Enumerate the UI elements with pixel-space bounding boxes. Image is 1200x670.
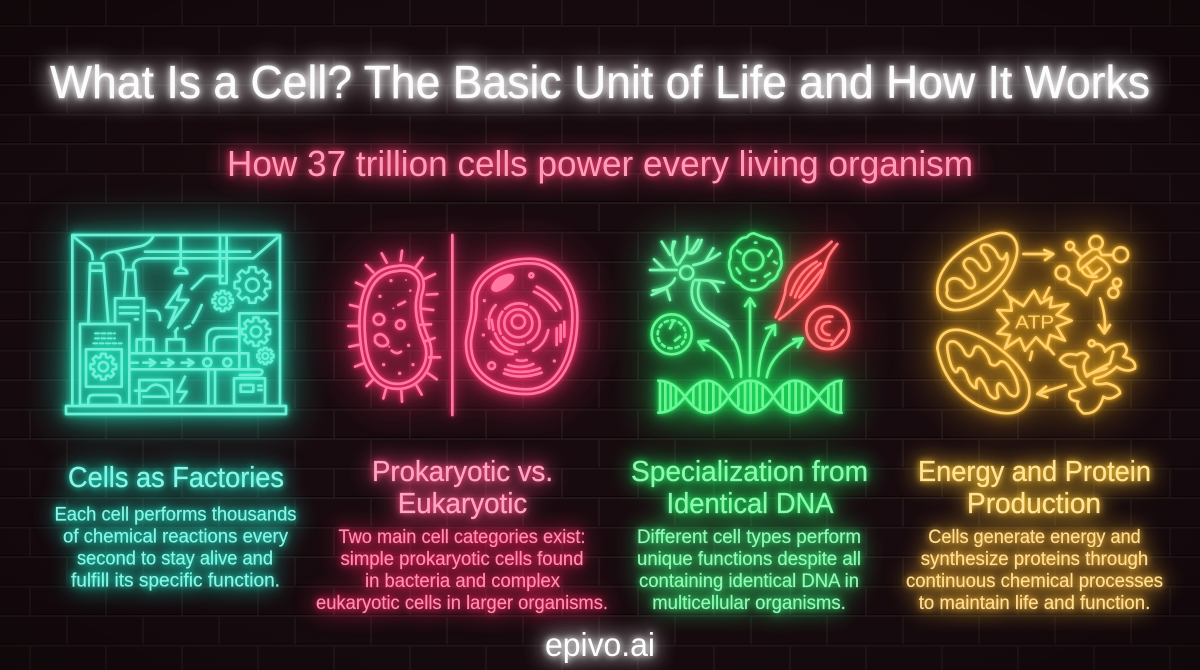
body text — [637, 526, 861, 614]
bottom mitochondrion — [937, 330, 1029, 413]
molecule — [1056, 236, 1128, 298]
body text: Two main cell categories exist: — [338, 526, 586, 548]
footer brand: epivo.ai — [545, 626, 655, 663]
body text: to maintain life and function. — [919, 592, 1150, 614]
body text: synthesize proteins through — [921, 548, 1148, 570]
body text: containing identical DNA in — [639, 570, 859, 592]
divider line — [448, 235, 456, 415]
wavy cell — [729, 233, 782, 290]
body text: fulfill its specific function. — [71, 570, 280, 592]
red blood cell — [806, 306, 849, 349]
icon: energy and protein cycle — [937, 233, 1135, 413]
eukaryotic cell — [466, 259, 577, 394]
heading: Production — [967, 488, 1101, 520]
body text: eukaryotic cells in larger organisms. — [316, 592, 608, 614]
heading: Prokaryotic vs. — [372, 456, 553, 488]
body text: second to stay alive and — [77, 548, 273, 570]
column: specialization from identical DNA — [631, 456, 868, 614]
body text: unique functions despite all — [637, 548, 861, 570]
cycle arrows — [1023, 250, 1110, 397]
round granular cell — [652, 314, 692, 354]
title: What Is a Cell? The Basic Unit of Life and How It Works — [50, 56, 1150, 108]
column: energy and protein production — [906, 456, 1163, 614]
heading — [631, 456, 868, 520]
body text — [316, 526, 608, 614]
body text: in bacteria and complex — [365, 570, 560, 592]
body text: Each cell performs thousands — [54, 504, 297, 526]
body text: continuous chemical processes — [906, 570, 1163, 592]
protein — [1060, 340, 1135, 413]
body text: multicellular organisms. — [652, 592, 846, 614]
icon: factory — [66, 235, 286, 414]
column: prokaryotic vs eukaryotic — [316, 456, 608, 614]
heading — [918, 456, 1151, 520]
body text: of chemical reactions every — [63, 526, 288, 548]
top mitochondrion — [937, 233, 1017, 310]
subtitle: How 37 trillion cells power every living organism — [227, 143, 973, 184]
prokaryotic bacterium — [348, 251, 440, 402]
icon: prokaryote vs eukaryote — [348, 235, 577, 415]
heading: Cells as Factories — [68, 462, 284, 494]
body text: Cells generate energy and — [928, 526, 1141, 548]
body text — [906, 526, 1163, 614]
muscle — [776, 242, 837, 319]
column: cells as factories — [54, 462, 297, 592]
heading — [372, 456, 553, 520]
neuron — [650, 237, 733, 339]
DNA helix — [658, 381, 842, 413]
body text — [54, 504, 297, 592]
heading: Specialization from — [631, 456, 868, 488]
ATP burst: ATP — [1015, 312, 1054, 333]
heading: Energy and Protein — [918, 456, 1151, 488]
icon: specialized cells from DNA — [650, 233, 849, 413]
body text: simple prokaryotic cells found — [340, 548, 584, 570]
ATP burst — [997, 288, 1072, 360]
arrows — [698, 298, 803, 377]
heading: Eukaryotic — [398, 488, 527, 520]
body text: Different cell types perform — [637, 526, 861, 548]
heading: Identical DNA — [666, 488, 834, 520]
